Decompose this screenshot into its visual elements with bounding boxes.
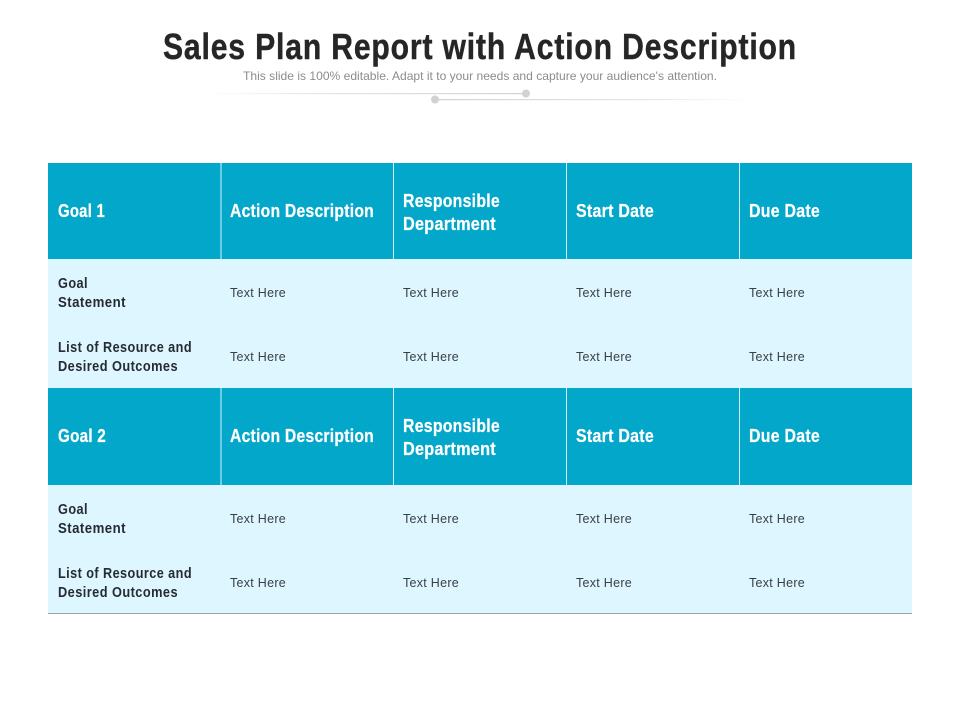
- subtitle: This slide is 100% editable. Adapt it to your needs and capture your audience's attention.: [243, 69, 717, 83]
- row: goal 1 header: Due Date: [749, 201, 820, 221]
- row: goal 2 header: Department: [403, 439, 496, 459]
- row: goal 1 header: Goal 1: [58, 201, 105, 221]
- row: goal 2 header: Action Description: [230, 426, 374, 446]
- row: goal 2 details: Goal: [58, 502, 88, 518]
- row: goal 2 header: Due Date: [749, 426, 820, 446]
- table: [48, 163, 912, 614]
- row: goal 1 header: Start Date: [576, 201, 654, 221]
- row: goal 1 details: Statement: [58, 295, 126, 311]
- row: goal 1 details: [48, 259, 912, 388]
- row: goal 2 details: List of Resource and: [58, 566, 192, 582]
- row: goal 2 details: Text Here: [403, 575, 459, 590]
- row: goal 1 details: Desired Outcomes: [58, 359, 178, 375]
- row: goal 2 details: Text Here: [749, 511, 805, 526]
- row: goal 1 details: List of Resource and: [58, 340, 192, 356]
- row: goal 2 header: Responsible: [403, 416, 500, 436]
- row: goal 2 details: Text Here: [576, 575, 632, 590]
- row: goal 1 header: Department: [403, 214, 496, 234]
- row: goal 1 header: Responsible: [403, 191, 500, 211]
- row: goal 1 details: Text Here: [749, 349, 805, 364]
- row: goal 1 details: Text Here: [230, 285, 286, 300]
- title: Sales Plan Report with Action Description: [163, 26, 797, 67]
- row: goal 1 details: Text Here: [403, 285, 459, 300]
- row: goal 1 details: Text Here: [230, 349, 286, 364]
- row: goal 2 details: Text Here: [576, 511, 632, 526]
- row: goal 2 details: Statement: [58, 521, 126, 537]
- row: goal 1 details: Text Here: [576, 285, 632, 300]
- row: goal 2 details: Desired Outcomes: [58, 585, 178, 601]
- row: goal 2 details: Text Here: [403, 511, 459, 526]
- row: goal 1 header: [48, 163, 912, 259]
- row: goal 1 details: Text Here: [576, 349, 632, 364]
- row: goal 2 details: Text Here: [230, 511, 286, 526]
- row: goal 2 details: Text Here: [230, 575, 286, 590]
- row: goal 2 details: [48, 485, 912, 613]
- row: goal 2 header: [48, 388, 912, 485]
- row: goal 1 details: Goal: [58, 276, 88, 292]
- row: goal 1 header: Action Description: [230, 201, 374, 221]
- row: goal 1 details: Text Here: [749, 285, 805, 300]
- row: goal 2 header: Goal 2: [58, 426, 106, 446]
- row: goal 1 details: Text Here: [403, 349, 459, 364]
- decorative connector: [205, 90, 755, 104]
- row: goal 2 details: Text Here: [749, 575, 805, 590]
- row: goal 2 header: Start Date: [576, 426, 654, 446]
